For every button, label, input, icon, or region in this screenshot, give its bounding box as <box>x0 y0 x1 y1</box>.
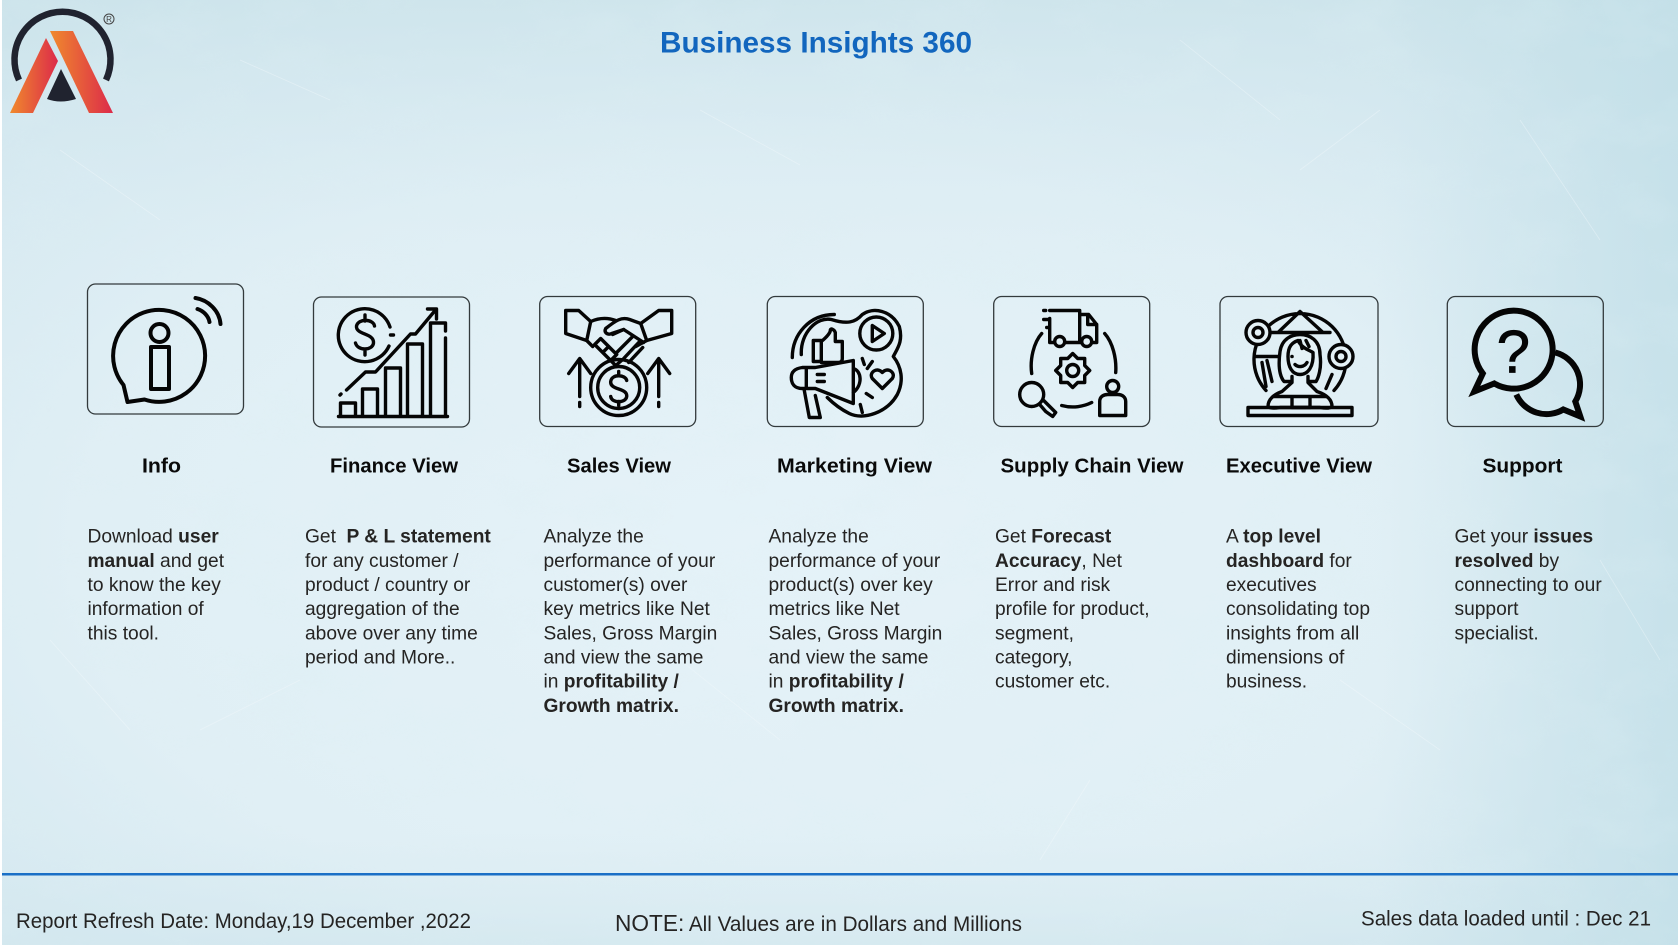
text: marketing description: performance of your <box>768 551 941 572</box>
panel: info <box>88 284 244 644</box>
heading: sales view: Sales View <box>567 455 671 478</box>
text: support description: resolved <box>1454 551 1533 572</box>
text: sales description: customer(s) over <box>544 575 688 596</box>
icon: info bubble <box>88 284 244 414</box>
text: supply chain description: , Net <box>1081 551 1123 572</box>
text: executive description: A top level <box>1226 527 1321 548</box>
text: sales description: Growth matrix. <box>544 696 679 717</box>
heading: supply chain view: Supply Chain View <box>1000 455 1184 478</box>
text: finance description: P & L statement <box>346 527 491 548</box>
text: executive description: executives <box>1226 575 1317 596</box>
text: supply chain description: Error and risk <box>995 575 1111 596</box>
text: executive description: consolidating top <box>1226 599 1370 620</box>
text: supply chain description: customer etc. <box>995 672 1110 693</box>
text: info description: this tool. <box>88 623 159 644</box>
text: sales description: performance of your <box>544 551 716 572</box>
text: support description: by <box>1533 551 1559 572</box>
text: finance description: for any customer / <box>305 551 459 572</box>
text: support description: specialist. <box>1454 623 1539 644</box>
icon: megaphone and social <box>767 296 923 426</box>
text: sales description: and view the same <box>544 647 703 668</box>
text: marketing description: and view the same <box>768 647 928 668</box>
text: sales description: Sales, Gross Margin <box>544 623 717 644</box>
text: executive description: dashboard <box>1226 551 1324 572</box>
icon: supply chain cycle <box>994 296 1150 426</box>
text: executive description: dimensions of <box>1226 647 1345 668</box>
text: sales description: Analyze the <box>544 527 644 548</box>
heading: support: Support <box>1482 455 1563 478</box>
text: support description: connecting to our <box>1454 575 1602 596</box>
icon: question bubbles <box>1447 296 1603 426</box>
icon: executive and globe <box>1220 296 1378 426</box>
text: supply chain description: segment, <box>995 623 1074 644</box>
text: finance description: Get <box>305 527 341 548</box>
text: finance description: aggregation of the <box>305 599 460 620</box>
text: info description: manual <box>88 551 155 572</box>
text: executive description: for <box>1324 551 1352 572</box>
text: sales description: in <box>544 672 564 693</box>
text: support description: support <box>1454 599 1519 620</box>
text: supply chain description: category, <box>995 647 1072 668</box>
text: marketing description: metrics like Net <box>768 599 900 620</box>
text: sales description: profitability / <box>564 672 680 693</box>
text: marketing description: Growth matrix. <box>768 696 904 717</box>
text: sales description: key metrics like Net <box>544 599 710 620</box>
text: supply chain description: Get Forecast <box>995 527 1111 548</box>
text: executive description: business. <box>1226 672 1307 693</box>
heading: marketing view: Marketing View <box>777 455 932 478</box>
text: executive description: insights from all <box>1226 623 1359 644</box>
footer: sales data loaded: Sales data loaded until : Dec 21 <box>1361 908 1651 930</box>
footer: report refresh date: Report Refresh Date: Monday,19 December ,2022 <box>16 910 471 933</box>
panel: support <box>1447 296 1603 644</box>
heading: info: Info <box>142 455 181 478</box>
text: marketing description: profitability / <box>789 672 905 693</box>
text: marketing description: in <box>768 672 789 693</box>
text: finance description: period and More.. <box>305 647 455 668</box>
panel: executive view <box>1220 296 1378 693</box>
text: marketing description: Sales, Gross Margin <box>768 623 942 644</box>
logo <box>10 12 114 113</box>
panel: marketing view <box>767 296 942 717</box>
text: info description: Download user <box>88 527 219 548</box>
text: supply chain description: profile for product, <box>995 599 1150 620</box>
text: finance description: product / country or <box>305 575 471 596</box>
footer: note: NOTE: All Values are in Dollars and Millions <box>615 910 1022 936</box>
heading: executive view: Executive View <box>1226 455 1372 478</box>
text: marketing description: product(s) over key <box>768 575 933 596</box>
panel: finance view <box>305 297 491 668</box>
icon: handshake and coin <box>540 296 696 426</box>
icon: question bubbles: ? <box>1497 318 1530 386</box>
title: Business Insights 360 <box>660 27 972 60</box>
text: finance description: above over any time <box>305 623 478 644</box>
icon: finance chart <box>314 297 470 427</box>
text: marketing description: Analyze the <box>768 527 869 548</box>
heading: finance view: Finance View <box>330 455 458 478</box>
text: info description: and get <box>155 551 225 572</box>
text: info description: to know the key <box>88 575 221 596</box>
panel: supply chain view <box>994 296 1184 693</box>
text: support description: Get your issues <box>1454 527 1593 548</box>
logo: R <box>106 15 112 24</box>
text: info description: information of <box>88 599 204 620</box>
text: supply chain description: Accuracy <box>995 551 1082 572</box>
panel: sales view <box>540 296 717 717</box>
